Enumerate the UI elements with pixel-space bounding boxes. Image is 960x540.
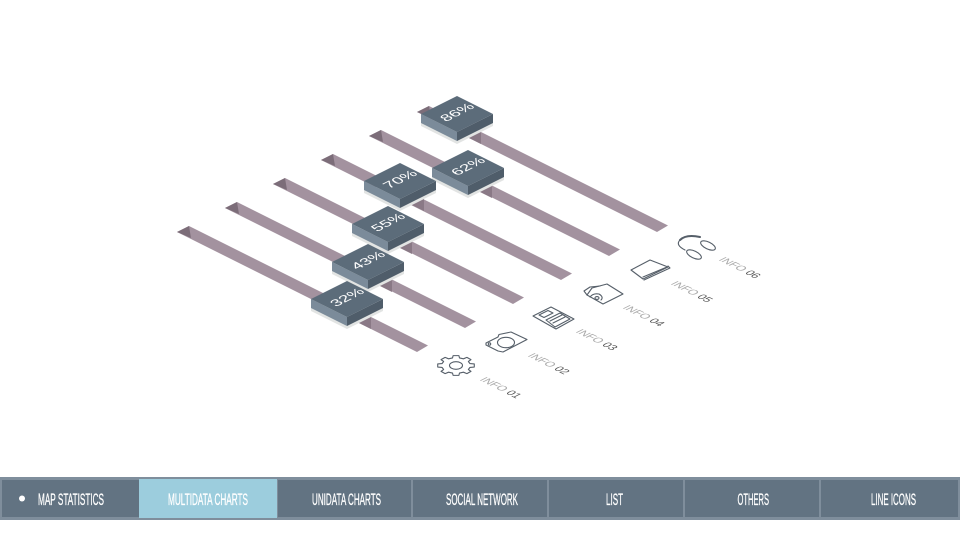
tab: list xyxy=(549,480,683,517)
track 1 xyxy=(177,226,428,352)
tab: unidata charts: UNIDATA CHARTS xyxy=(312,491,381,509)
block 70%: 70% xyxy=(380,168,422,191)
label: info 06: INFO 06 xyxy=(715,256,763,280)
track 5 xyxy=(369,130,620,256)
icon: camera xyxy=(486,332,527,352)
tab: multidata charts (active): MULTIDATA CHARTS xyxy=(168,491,248,509)
icon: newspaper xyxy=(533,307,574,329)
track 6 xyxy=(417,106,668,232)
track 2 xyxy=(225,202,476,328)
tab: others xyxy=(685,480,819,517)
block 86% xyxy=(421,96,493,144)
tab: multidata charts (active) xyxy=(139,479,277,518)
icon: wallet folder xyxy=(584,284,623,304)
block 32%: 32% xyxy=(327,286,369,309)
block 55%: 55% xyxy=(368,211,410,234)
icon: book xyxy=(631,260,670,280)
icon: gear xyxy=(438,356,474,375)
block 43%: 43% xyxy=(348,249,390,272)
block 55% xyxy=(352,206,424,254)
nav background xyxy=(0,477,960,520)
label: info 05: INFO 05 xyxy=(667,280,715,304)
track 4 xyxy=(321,154,572,280)
slider blocks xyxy=(311,96,504,329)
tab: others: OTHERS xyxy=(738,491,769,509)
label: info 04: INFO 04 xyxy=(619,304,667,328)
navigation bar xyxy=(0,477,960,520)
tab: map statistics xyxy=(2,480,139,517)
track 3 xyxy=(273,178,524,304)
info labels xyxy=(476,256,763,400)
icons xyxy=(438,236,717,375)
tab: social network: SOCIAL NETWORK xyxy=(446,491,518,509)
block 62%: 62% xyxy=(448,155,490,178)
tab: map statistics: MAP STATISTICS xyxy=(38,491,104,509)
tab: list: LIST xyxy=(606,491,623,509)
block 32% xyxy=(311,281,383,329)
block 86%: 86% xyxy=(437,101,479,124)
tab: unidata charts xyxy=(278,480,411,517)
slider tracks xyxy=(177,106,668,352)
block 62% xyxy=(432,150,504,198)
tab: social network xyxy=(413,480,547,517)
label: info 03: INFO 03 xyxy=(572,328,620,352)
block 70% xyxy=(364,163,436,211)
block 43% xyxy=(332,244,404,292)
label: info 02: INFO 02 xyxy=(524,352,572,376)
icon: headphones xyxy=(678,236,717,261)
tab: line icons xyxy=(821,480,958,517)
label: info 01: INFO 01 xyxy=(476,376,524,400)
